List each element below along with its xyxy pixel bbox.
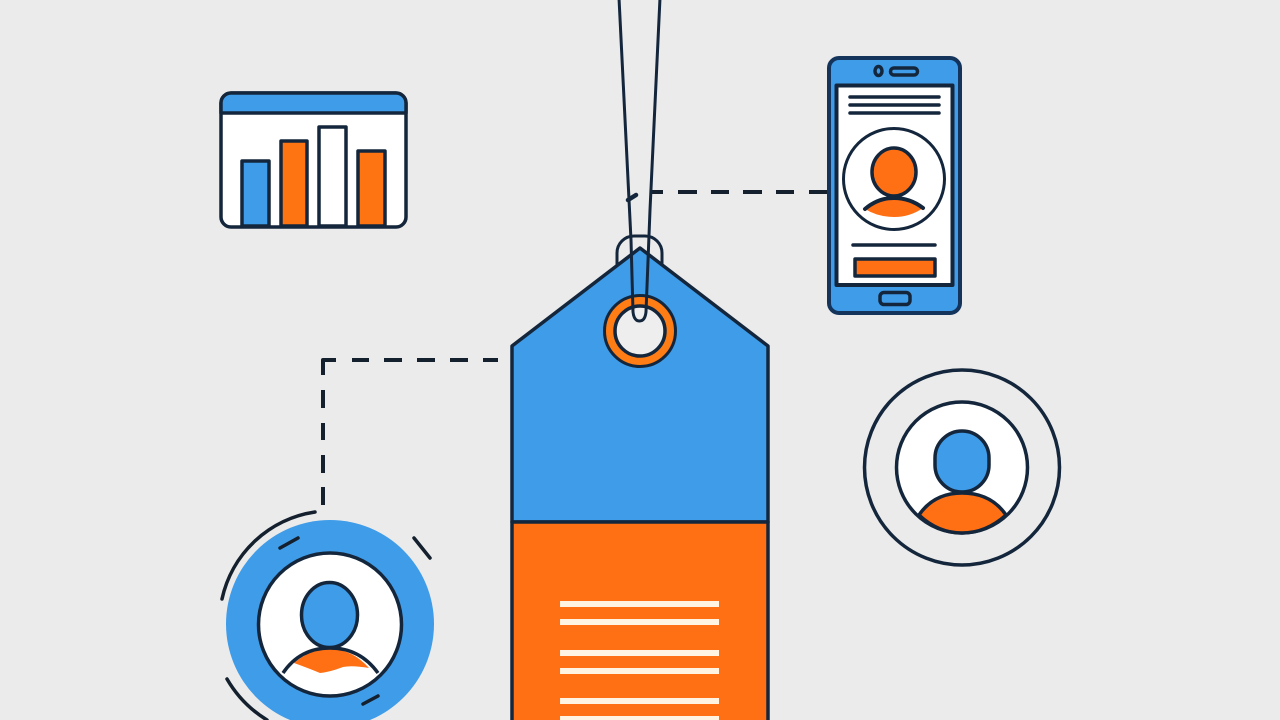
- tag loop behind tag: [617, 236, 662, 268]
- phone camera and speaker: [875, 66, 918, 76]
- dashed connector: string to phone: [652, 190, 828, 194]
- inner white circle: [258, 553, 402, 696]
- icon: profile in blue circle: [222, 512, 434, 720]
- motion arcs: [222, 512, 430, 720]
- tag eyelet hole: [615, 306, 665, 356]
- dashed connector: tag to profile circle: [323, 360, 498, 505]
- phone orange button: [855, 259, 935, 276]
- icon: profile in double circle: [864, 370, 1060, 565]
- icon: bar chart window: [221, 93, 406, 227]
- tag blue body: [512, 248, 768, 522]
- chart bars: [242, 127, 385, 226]
- chart header bar: [221, 93, 406, 113]
- profile head: [302, 582, 358, 648]
- icon: smartphone with profile: [829, 58, 960, 313]
- hanging string: [619, 0, 660, 321]
- tag eyelet ring: [604, 296, 676, 366]
- profile shirt: [294, 649, 369, 673]
- phone home button: [880, 292, 910, 304]
- profile head: [935, 431, 989, 492]
- price tag: [512, 248, 768, 720]
- tag text lines: [560, 601, 719, 720]
- phone text lines: [850, 97, 939, 245]
- string knot mark: [628, 195, 636, 200]
- phone screen: [836, 86, 952, 285]
- profile shoulder line: [283, 648, 378, 673]
- phone profile avatar: [844, 128, 944, 230]
- tag orange panel: [512, 522, 768, 720]
- profile shoulders: [919, 493, 1006, 533]
